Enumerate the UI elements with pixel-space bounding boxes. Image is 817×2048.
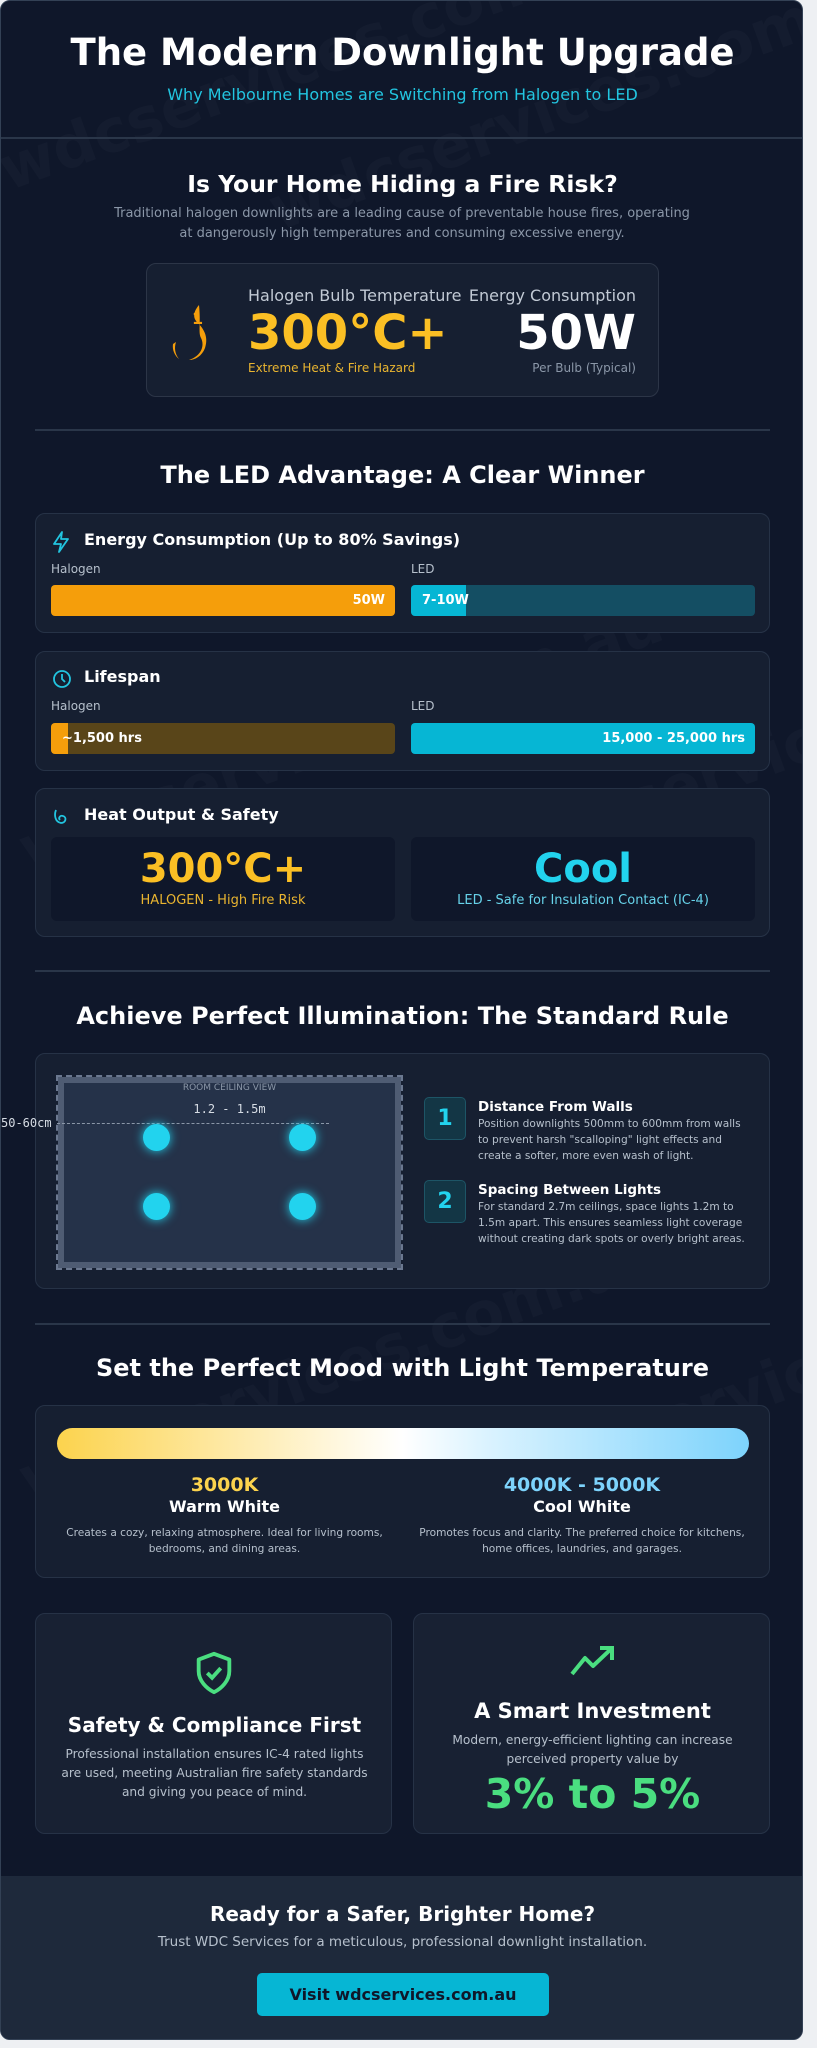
bar: LED 7-10W: 7-10W [422,593,469,608]
diagram: room ceiling view: ROOM CEILING VIEW [183,1083,276,1093]
step 2: For standard 2.7m ceilings, space lights 1.2m to 1.5m apart. This ensures seamless light coverage without creating dark spots or overly bright areas. [478,1201,745,1245]
cool white: 4000K - 5000K [504,1474,660,1496]
panel: lifespan: LED [411,699,435,713]
warm white: Creates a cozy, relaxing atmosphere. Ideal for living rooms, bedrooms, and dining areas. [66,1527,383,1555]
subtitle: Why Melbourne Homes are Switching from Halogen to LED [167,85,638,104]
gradient bar [57,1428,749,1459]
infographic card: wdcservices.com.au [10,587,672,885]
icon: flame [172,305,206,360]
text: Modern, energy-efficient lighting can increase perceived property value by [452,1733,733,1766]
panel: energy consumption: Halogen [51,562,101,576]
intro text: Traditional halogen downlights are a leading cause of preventable house fires, operating at dangerously high temperatures and consuming excessive energy. [114,206,690,241]
panel: energy consumption [35,513,770,633]
bar: halogen lifespan [51,723,395,754]
bar: LED lifespan [411,723,755,754]
heading: fire risk: Is Your Home Hiding a Fire Risk? [187,170,618,198]
stat: energy: Energy Consumption [469,286,636,305]
cool white: Cool White [533,1497,631,1516]
step 2: Spacing Between Lights [478,1182,661,1198]
warm white: Warm White [169,1497,280,1516]
icon: shield [196,1652,232,1694]
panel: light temperature [35,1405,770,1578]
warm white [66,1474,383,1555]
card: investment [413,1613,770,1834]
text: Professional installation ensures IC-4 rated lights are used, meeting Australian fire safety standards and giving you peace of mind. [61,1747,368,1799]
icon: trending up [570,1646,614,1676]
title: The Modern Downlight Upgrade [70,31,735,74]
warm white: 3000K [191,1474,258,1496]
stat: energy [469,286,636,375]
step 1: Position downlights 500mm to 600mm from walls to prevent harsh "scalloping" light effects and create a softer, more even wash of light. [478,1118,741,1162]
diagram: room ceiling view: 1.2 - 1.5m [193,1102,266,1116]
box: LED cool [411,837,755,921]
bar: LED lifespan: 15,000 - 25,000 hrs [602,731,745,746]
bar: LED 7-10W [411,585,755,616]
bar: halogen 50W: 50W [353,593,385,608]
cool white [419,1474,745,1555]
heading: Heat Output & Safety [84,805,279,824]
step 1: Distance From Walls [478,1099,633,1115]
stat: 3% to 5%: 3% to 5% [485,1770,700,1818]
icon: clock [53,670,71,688]
box: halogen heat: HALOGEN - High Fire Risk [141,893,305,908]
heading: Safety & Compliance First [68,1713,361,1737]
footer [1,1876,804,2041]
stat: energy: 50W [516,305,636,361]
icon: lightning [53,531,69,553]
box: halogen heat: 300°C+ [140,846,306,892]
heading: A Smart Investment [474,1699,711,1723]
box: LED cool: LED - Safe for Insulation Contact (IC-4) [457,893,709,908]
stat: temperature: Extreme Heat & Fire Hazard [248,361,415,375]
card: safety [35,1613,392,1834]
icon: flame: 1 [192,309,203,328]
panel: lifespan [35,651,770,771]
box: halogen heat [51,837,395,921]
stat: temperature [248,286,461,375]
panel: lifespan: Halogen [51,699,101,713]
infographic card: wdcservices.com.au [10,1217,672,1515]
stat: temperature: Halogen Bulb Temperature [248,286,461,305]
footer text: Trust WDC Services for a meticulous, professional downlight installation. [158,1934,647,1950]
stat: temperature: 300°C+ [248,305,448,361]
bar: halogen lifespan: ~1,500 hrs [62,731,142,746]
panel: energy consumption: LED [411,562,435,576]
stat: energy: Per Bulb (Typical) [532,361,636,375]
step 1: 1 [437,1106,453,1131]
step 2: 2 [437,1189,453,1214]
heading: Energy Consumption (Up to 80% Savings) [84,530,460,549]
footer heading: Ready for a Safer, Brighter Home? [210,1902,595,1926]
button: Visit wdcservices.com.au [289,1985,517,2004]
heading: LED advantage: The LED Advantage: A Clear Winner [160,461,645,489]
icon: heat [54,810,66,824]
panel: heat output [35,788,770,937]
panel: illumination [35,1053,770,1289]
stat box [146,263,659,397]
diagram: room ceiling view: 50-60cm [1,1116,52,1130]
step 2 [424,1180,745,1245]
cool white: Promotes focus and clarity. The preferred choice for kitchens, home offices, laundries, and garages. [419,1527,745,1555]
diagram: room ceiling view [1,1075,403,1270]
heading: Lifespan [84,667,161,686]
bar: halogen 50W [51,585,395,616]
button [257,1973,549,2016]
step 1 [424,1097,741,1162]
heading: illumination: Achieve Perfect Illumination: The Standard Rule [76,1002,729,1030]
heading: light temperature: Set the Perfect Mood with Light Temperature [96,1354,709,1382]
box: LED cool: Cool [534,846,632,892]
